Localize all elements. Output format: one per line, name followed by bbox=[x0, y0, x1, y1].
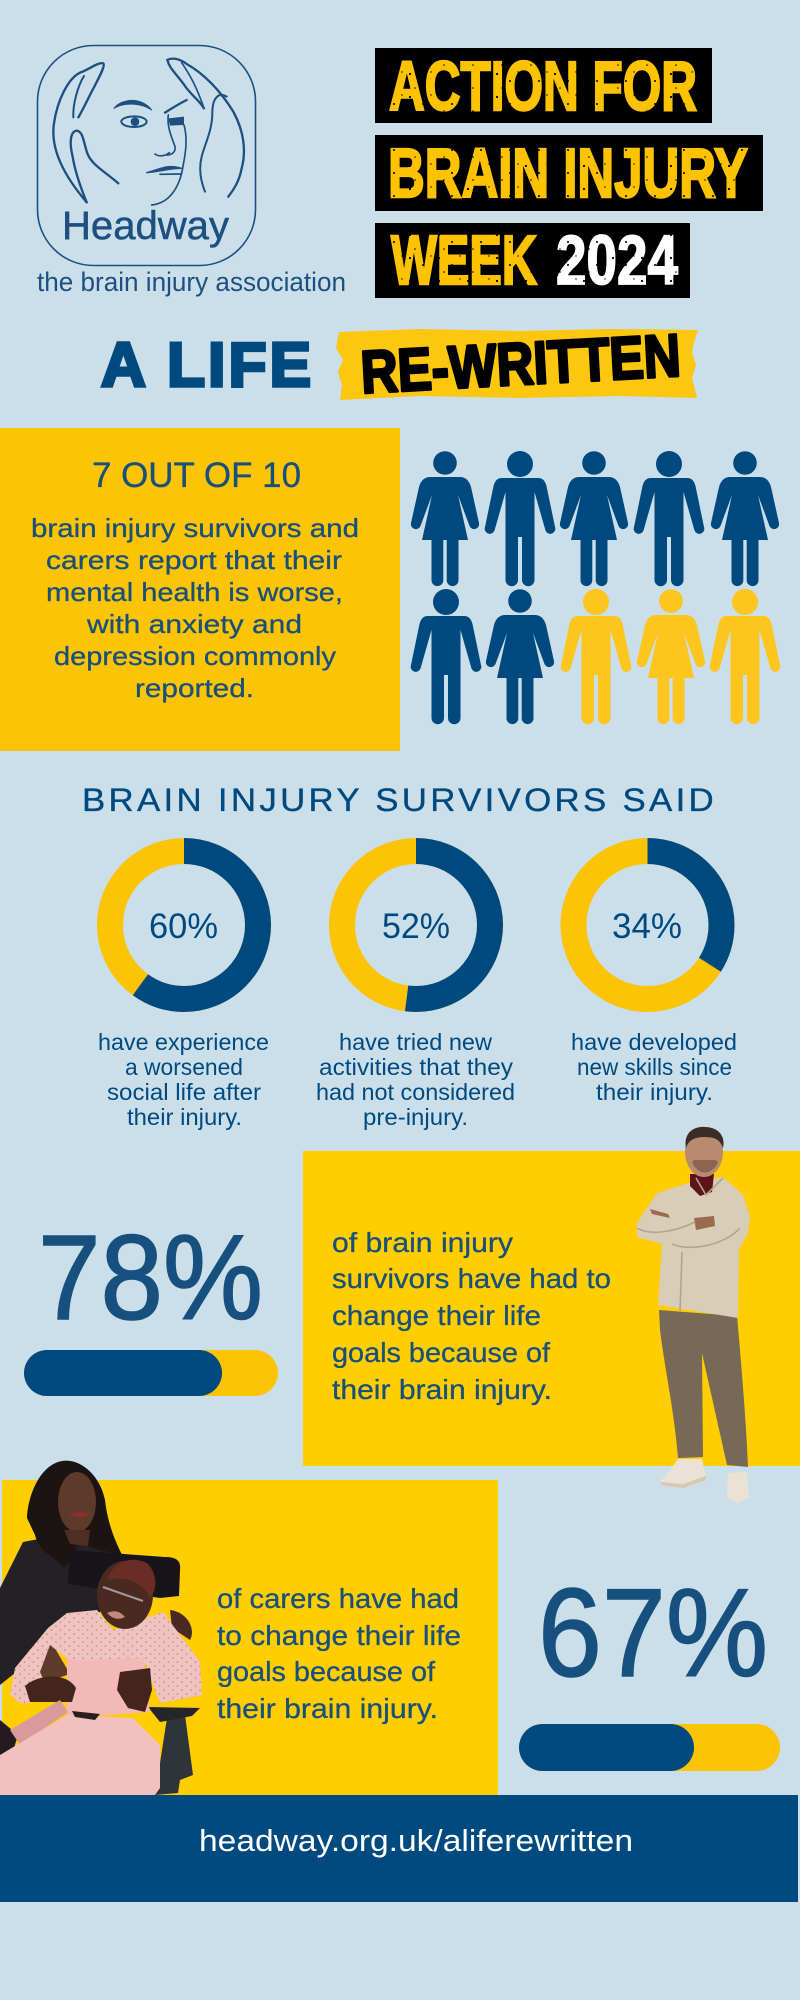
donut chart: 52%: 52% bbox=[382, 907, 450, 946]
person 10 bbox=[710, 589, 780, 724]
person 4 bbox=[634, 451, 704, 586]
donut chart: 34% bbox=[574, 851, 722, 999]
logo icon: face between two hands bbox=[53, 59, 244, 205]
heading: brain injury survivors said: BRAIN INJURY SURVIVORS SAID bbox=[82, 782, 717, 818]
photo: carer with woman in wheelchair bbox=[0, 1461, 202, 1795]
statistic: 67%: 67% bbox=[538, 1564, 768, 1703]
panel body text: reported. bbox=[135, 673, 254, 703]
caption: 34% bbox=[571, 1029, 737, 1105]
panel text: their brain injury. bbox=[332, 1374, 552, 1405]
panel text: change their life bbox=[332, 1300, 541, 1331]
panel body text bbox=[31, 513, 359, 703]
progress bar: 78% bbox=[24, 1350, 278, 1396]
panel text: of brain injury bbox=[332, 1227, 513, 1258]
donut chart: 60%: 60% bbox=[149, 907, 218, 946]
logo wordmark: Headway bbox=[62, 204, 229, 248]
caption: 52%: pre-injury. bbox=[363, 1104, 468, 1130]
title: Action for Brain Injury Week 2024 bbox=[375, 47, 763, 299]
panel text: goals because of bbox=[332, 1337, 550, 1368]
person 1 bbox=[411, 451, 479, 586]
panel text: to change their life bbox=[217, 1620, 461, 1651]
panel text: their brain injury. bbox=[217, 1693, 438, 1724]
caption: 52%: had not considered bbox=[316, 1079, 515, 1105]
panel body text: brain injury survivors and bbox=[31, 513, 359, 543]
logo tagline: the brain injury association bbox=[37, 267, 346, 297]
subtitle: RE-WRITTEN on yellow tape: RE-WRITTEN bbox=[359, 322, 682, 406]
panel: carers' life goals bbox=[2, 1480, 498, 1795]
caption: 52%: have tried new bbox=[339, 1029, 492, 1055]
title: Action for Brain Injury Week 2024: WEEK bbox=[391, 221, 537, 299]
panel text: of carers have had bbox=[217, 1583, 459, 1614]
panel text: goals because of bbox=[217, 1656, 435, 1687]
donut chart: 60% bbox=[110, 851, 258, 999]
person 6 bbox=[411, 589, 481, 724]
person 2 bbox=[485, 451, 555, 586]
caption: 34%: their injury. bbox=[596, 1079, 713, 1105]
panel text bbox=[217, 1583, 461, 1724]
person 9 bbox=[637, 589, 705, 724]
caption: 60%: social life after bbox=[107, 1079, 261, 1105]
panel text bbox=[332, 1227, 611, 1405]
panel body text: with anxiety and bbox=[86, 609, 302, 639]
panel heading: 7 OUT OF 10 bbox=[92, 456, 301, 495]
panel body text: depression commonly bbox=[54, 641, 336, 671]
panel: 7 out of 10 bbox=[0, 428, 400, 751]
logo: Headway bbox=[37, 46, 346, 297]
caption: 52% bbox=[316, 1029, 515, 1130]
title: Action for Brain Injury Week 2024: 2024 bbox=[556, 221, 678, 299]
footer band with website link: headway.org.uk/aliferewritten bbox=[199, 1823, 633, 1858]
panel: survivors' life goals bbox=[303, 1151, 800, 1466]
subtitle: A LIFE: A LIFE bbox=[101, 331, 311, 400]
caption: 34%: have developed bbox=[571, 1029, 737, 1055]
person 5 bbox=[711, 451, 779, 586]
panel body text: carers report that their bbox=[46, 545, 342, 575]
footer band with website link bbox=[0, 1795, 798, 1902]
progress bar: 67% bbox=[519, 1724, 780, 1771]
panel text: survivors have had to bbox=[332, 1263, 611, 1294]
caption: 34%: new skills since bbox=[577, 1054, 732, 1080]
person 3 bbox=[560, 451, 628, 586]
donut chart: 52% bbox=[342, 851, 490, 999]
person 7 bbox=[486, 589, 554, 724]
panel body text: mental health is worse, bbox=[46, 577, 343, 607]
caption: 60%: their injury. bbox=[127, 1104, 242, 1130]
caption: 52%: activities that they bbox=[319, 1054, 514, 1080]
caption: 60%: a worsened bbox=[125, 1054, 243, 1080]
caption: 60%: have experience bbox=[98, 1029, 269, 1055]
person 8 bbox=[561, 589, 631, 724]
pictogram: 7 of 10 people highlighted bbox=[411, 451, 780, 724]
caption: 60% bbox=[98, 1029, 269, 1130]
donut chart: 34%: 34% bbox=[612, 907, 682, 946]
statistic: 78%: 78% bbox=[38, 1209, 263, 1345]
photo: man with crossed arms bbox=[637, 1127, 750, 1503]
